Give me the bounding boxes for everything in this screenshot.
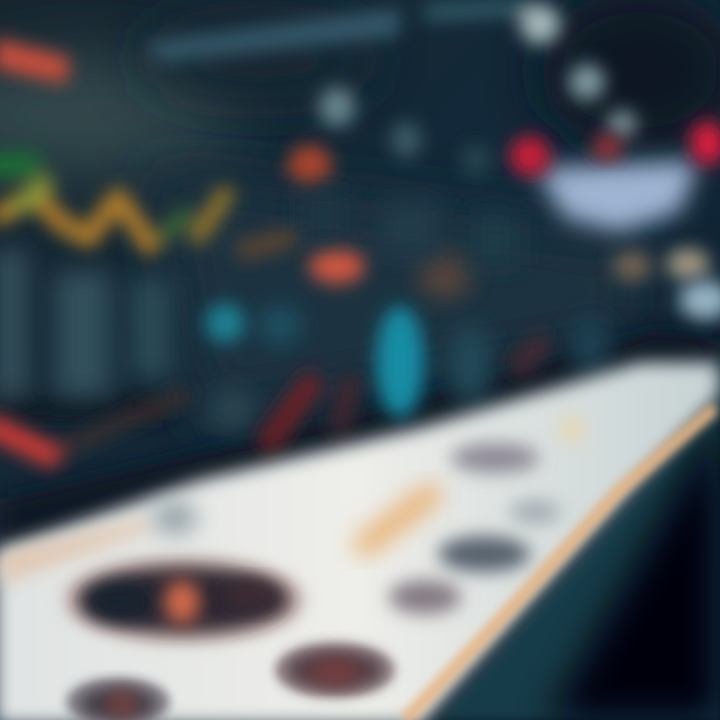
lower right dark area bbox=[440, 400, 720, 720]
small grey dials bbox=[389, 443, 561, 614]
grey desk button bbox=[153, 502, 197, 534]
orange label on desk bbox=[365, 495, 430, 545]
medium dial bbox=[275, 643, 395, 697]
chart line: green and yellow zigzag bbox=[0, 165, 290, 250]
small orange mark bbox=[560, 416, 584, 444]
orange desk edge bbox=[405, 408, 715, 720]
red streaks, lower left bbox=[0, 345, 540, 455]
monitor with red lights, right bbox=[510, 121, 720, 232]
coloured glows bbox=[288, 145, 720, 320]
top light bars bbox=[150, 0, 637, 176]
red tag top left bbox=[0, 38, 70, 84]
column screens bbox=[0, 190, 520, 420]
teal shapes bbox=[205, 303, 610, 432]
white desk surface bbox=[0, 362, 720, 720]
large dial bbox=[66, 560, 302, 640]
desk peach left edge bbox=[0, 518, 150, 585]
bottom dial bbox=[66, 678, 170, 720]
